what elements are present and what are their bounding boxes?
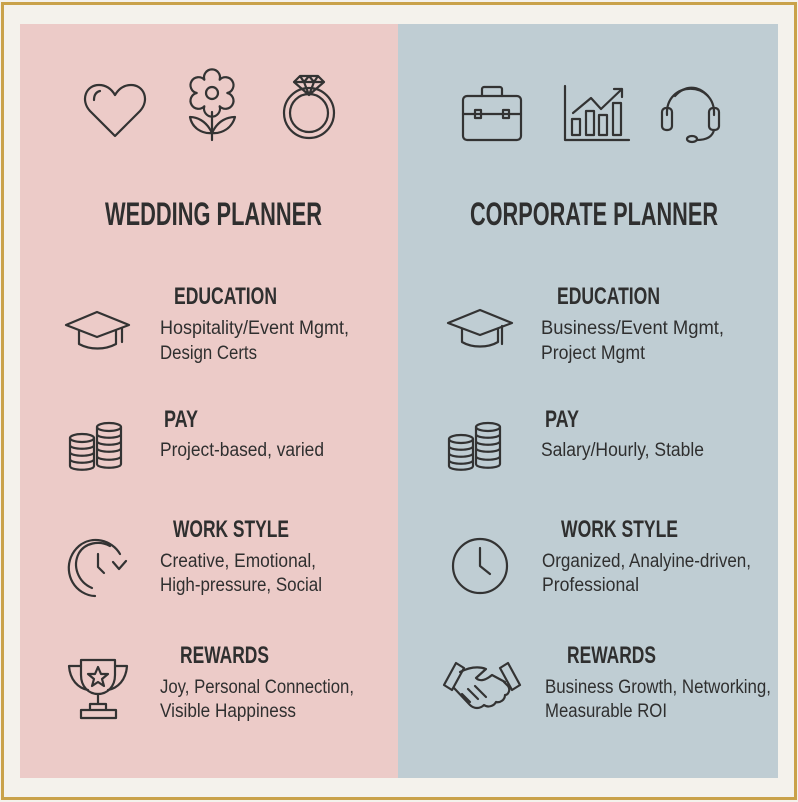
section: education: Business/Event Mgmt,	[541, 318, 724, 339]
section: pay	[449, 406, 704, 470]
section: work style: WORK STYLE	[173, 516, 289, 543]
section: pay	[70, 406, 324, 470]
icon: ring	[284, 76, 334, 138]
icon: graduation cap	[66, 312, 129, 348]
section: rewards	[69, 642, 354, 722]
icon: coins	[449, 423, 500, 470]
section: education	[66, 283, 349, 364]
title: wedding planner: WEDDING PLANNER	[105, 196, 322, 232]
icon: clock arrow	[69, 540, 126, 596]
section: education	[448, 283, 724, 364]
icon: trophy	[69, 660, 127, 718]
section: pay: PAY	[545, 406, 579, 433]
icon: handshake	[444, 663, 520, 708]
section: work style: Creative, Emotional,	[160, 551, 316, 572]
section: work style	[69, 516, 322, 596]
section: rewards: Measurable ROI	[545, 701, 667, 722]
section: pay: PAY	[164, 406, 198, 433]
icon: graduation cap	[448, 310, 512, 346]
section: rewards: REWARDS	[567, 642, 656, 669]
section: work style: Organized, Analyine-driven,	[542, 551, 751, 572]
icon: coins	[70, 423, 121, 470]
icon: flower	[190, 69, 235, 140]
icon: heart	[85, 85, 145, 136]
icon: headset	[662, 88, 719, 142]
panel: corporate planner	[398, 24, 778, 778]
section: education: Hospitality/Event Mgmt,	[160, 318, 349, 339]
section: rewards: Visible Happiness	[160, 701, 296, 722]
section: work style: WORK STYLE	[561, 516, 678, 543]
section: education: Design Certs	[160, 343, 257, 364]
section: education: EDUCATION	[174, 283, 277, 310]
section: education: EDUCATION	[557, 283, 660, 310]
section: rewards: Joy, Personal Connection,	[160, 677, 354, 698]
panel: wedding planner	[20, 24, 398, 778]
icon: clock	[453, 539, 507, 593]
section: rewards: REWARDS	[180, 642, 269, 669]
icon: growth chart	[565, 86, 629, 140]
icon: briefcase	[463, 87, 521, 140]
section: pay: Project-based, varied	[160, 440, 324, 461]
section: pay: Salary/Hourly, Stable	[541, 440, 704, 461]
section: work style: High-pressure, Social	[160, 575, 322, 596]
section: work style: Professional	[542, 575, 639, 596]
section: rewards: Business Growth, Networking,	[545, 677, 771, 698]
section: work style	[453, 516, 751, 596]
section: education: Project Mgmt	[541, 343, 646, 364]
section: rewards	[444, 642, 771, 722]
